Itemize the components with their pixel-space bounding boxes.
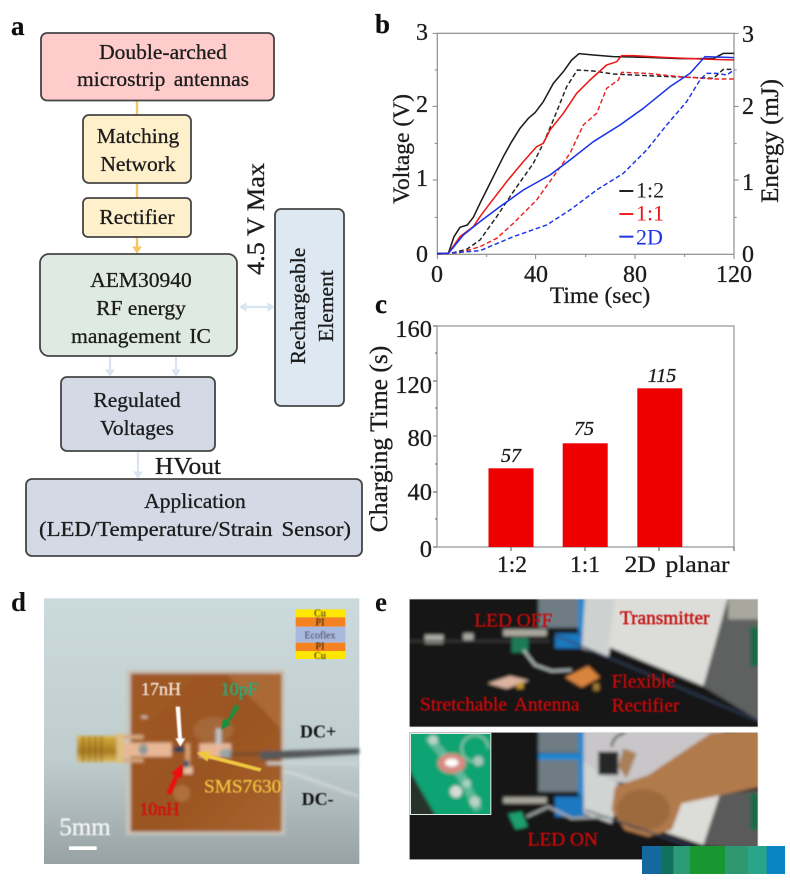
right axis numbers: 2 [742, 94, 754, 120]
x axis numbers: 80 [623, 262, 647, 288]
box: regulated voltages [61, 377, 215, 451]
right axis numbers: 3 [742, 22, 754, 48]
category labels: 2D planar [624, 552, 730, 578]
panel a: system block diagram [11, 11, 362, 556]
y axis numbers [395, 316, 432, 563]
y axis numbers: 80 [408, 425, 432, 452]
y axis numbers: 160 [395, 316, 432, 343]
box: application: (LED/Temperature/Strain Sensor) [39, 517, 351, 541]
photo: LED off: Rectifier [612, 696, 680, 717]
plot lines [433, 33, 739, 259]
box: matching network: Matching [97, 124, 179, 148]
layer stack inset: Cu [314, 651, 326, 662]
axes frame [433, 326, 734, 551]
annotation labels: 5mm [59, 814, 111, 841]
bar values: 115 [648, 365, 676, 387]
arrows: yellow signal path [133, 101, 141, 253]
box: rechargeable element [275, 209, 344, 406]
bar values: 75 [574, 418, 594, 440]
annotation arrows [167, 704, 262, 795]
right axis numbers: 0 [742, 242, 754, 268]
photo: LED off [406, 596, 761, 730]
y axis numbers: 40 [408, 479, 432, 506]
layer stack inset: Ecoflex [304, 630, 336, 641]
axis title: voltage: Voltage (V) [389, 94, 415, 204]
box: matching network: Network [100, 152, 176, 176]
box: energy management IC: AEM30940 [90, 268, 192, 292]
label b: b [375, 9, 390, 39]
layer stack inset: PI [316, 617, 324, 628]
legend: 1:2 [636, 178, 664, 203]
layer stack inset: PI [316, 642, 324, 653]
category labels [497, 552, 730, 578]
photo: LED on: LED ON [528, 830, 598, 851]
dashed energy curves [437, 69, 734, 254]
bars [488, 388, 682, 547]
annotation labels: SMS7630 [204, 777, 281, 798]
left axis numbers: 2 [416, 92, 428, 118]
box: regulated voltages: Regulated [93, 388, 181, 412]
box: energy management IC [40, 254, 237, 356]
legend: 2D [636, 224, 663, 249]
label c: c [375, 289, 387, 319]
legend: 1:1 [636, 201, 664, 226]
photo: LED off: LED OFF [474, 611, 552, 632]
annotation labels [59, 679, 336, 841]
axis title: time: Time (sec) [550, 283, 650, 309]
solid voltage curves [437, 53, 734, 253]
left axis numbers: 1 [416, 166, 428, 192]
label: HVout: HVout [155, 454, 221, 480]
scale bar [69, 846, 97, 850]
inset: lit LED close-up [408, 731, 494, 817]
bar values: 57 [501, 445, 522, 467]
left axis numbers [416, 20, 428, 268]
x axis numbers: 120 [716, 262, 752, 288]
panel b: voltage and energy chart [375, 9, 784, 309]
axis title: charging time: Charging Time (s) [364, 346, 393, 532]
x axis numbers: 0 [431, 262, 443, 288]
box: rectifier: Rectifier [99, 205, 175, 229]
box: energy management IC: management IC [71, 324, 211, 348]
box: antennas: microstrip antennas [77, 67, 249, 91]
layer stack inset [296, 609, 345, 662]
photo: circuit board and connector [77, 669, 359, 835]
x axis numbers: 40 [524, 262, 548, 288]
annotation labels: 10pF [221, 679, 258, 699]
arrows: pale blue power path [106, 303, 274, 478]
bar values [501, 365, 676, 467]
right axis numbers [742, 22, 754, 268]
photo: LED on [406, 729, 761, 863]
panel c: charging time bar chart [364, 289, 734, 578]
annotation labels: DC+ [300, 721, 336, 741]
box: antennas: Double-arched [99, 40, 227, 64]
axis title: energy: Energy (mJ) [757, 79, 784, 203]
box: rectifier [83, 198, 191, 237]
panel d: rectifier photo [44, 598, 359, 864]
box: application: Application [144, 489, 246, 513]
photo: LED off: Flexible [612, 671, 675, 692]
annotation labels: DC- [302, 789, 334, 809]
category labels: 1:1 [570, 552, 600, 578]
box: rechargeable element: Element [314, 270, 338, 342]
category labels: 1:2 [497, 552, 527, 578]
box: regulated voltages: Voltages [100, 416, 174, 440]
layer stack inset: Cu [314, 609, 326, 620]
y axis numbers: 120 [395, 372, 432, 399]
panel e: LED demonstration photos [406, 596, 785, 874]
photo: LED off: Stretchable Antenna [420, 695, 580, 716]
colour band overlay [642, 846, 785, 874]
legend [619, 178, 664, 249]
label e: e [375, 587, 387, 617]
label a: a [11, 11, 25, 41]
box: energy management IC: RF energy [96, 296, 186, 320]
right axis numbers: 1 [742, 170, 754, 196]
left axis numbers: 0 [416, 242, 428, 268]
box: matching network [83, 115, 191, 183]
label d: d [11, 587, 26, 617]
left axis numbers: 3 [416, 20, 428, 46]
y axis numbers: 0 [420, 536, 432, 563]
photo: LED off: Transmitter [620, 608, 710, 629]
box: application [26, 479, 362, 556]
photo background [44, 598, 359, 864]
annotation labels: 17nH [141, 679, 181, 699]
box: rechargeable element: Rechargeable [286, 248, 310, 364]
x axis numbers [431, 262, 752, 288]
label: 4.5 V Max: 4.5 V Max [243, 162, 270, 275]
annotation labels: 10nH [139, 799, 179, 819]
box: antennas [41, 33, 274, 100]
